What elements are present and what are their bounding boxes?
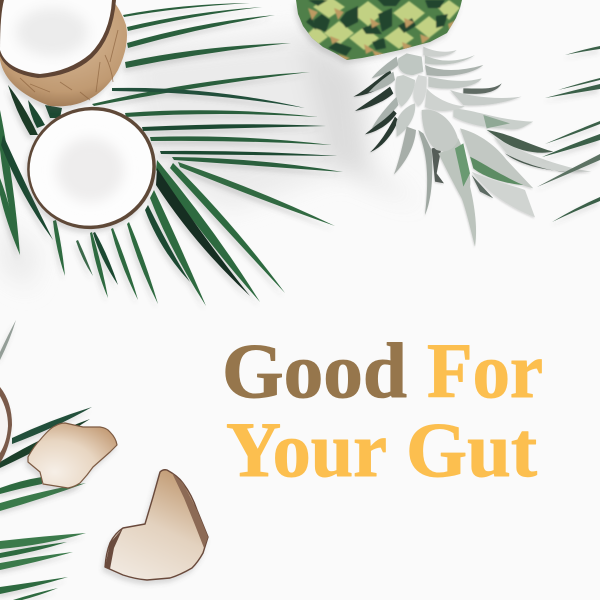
coconut flesh hollow (56, 138, 124, 202)
coconut rim (0, 387, 12, 463)
crown lower right leaves (472, 172, 535, 217)
coconut half: centre (16, 95, 167, 241)
palm frond: bottom left (0, 320, 92, 600)
grey frond tip (0, 320, 16, 360)
crown left leaves (368, 57, 398, 128)
title word: For: For (427, 327, 543, 414)
coconut flesh (0, 396, 8, 453)
tan scale spines (308, 8, 456, 62)
chip dark edge (172, 473, 208, 548)
title word: Your: Your (226, 406, 387, 493)
title (222, 327, 543, 493)
crown upper right leaves (453, 108, 533, 129)
palm frond: top right (537, 46, 600, 222)
crown centre leaves (398, 53, 423, 75)
pineapple body (296, 0, 462, 60)
crown long green leaf (438, 138, 476, 247)
soft background shadows (0, 25, 420, 290)
coconut half: top (0, 0, 127, 106)
pineapple scales (304, 0, 460, 62)
frond leaflets, lower (0, 0, 285, 306)
coconut rim (0, 0, 116, 78)
coconut shell chip: left (28, 423, 117, 488)
dark scale hollows (306, 0, 448, 56)
pineapple fruit (296, 0, 462, 62)
husk fibre marks (20, 30, 118, 100)
crown tip leaves (487, 130, 553, 153)
coconut flesh hollow (16, 8, 88, 56)
palm frond: top left (0, 0, 343, 306)
coconut flesh (19, 99, 163, 237)
coconut half: left edge (0, 387, 12, 463)
light scale diamonds (304, 0, 460, 50)
coconut husk (0, 0, 127, 106)
coconut shell chip: right (105, 470, 208, 580)
coconut flesh (0, 0, 112, 74)
crown lower leaves (394, 127, 416, 174)
title word: Good: Good (222, 327, 407, 414)
crown big centre leaf (422, 109, 458, 151)
frond leaflets, upper (92, 3, 343, 226)
coconut rim (16, 95, 167, 241)
crown dark back leaves (353, 70, 398, 152)
title word: Gut: Gut (406, 406, 537, 493)
pineapple crown (353, 47, 592, 247)
